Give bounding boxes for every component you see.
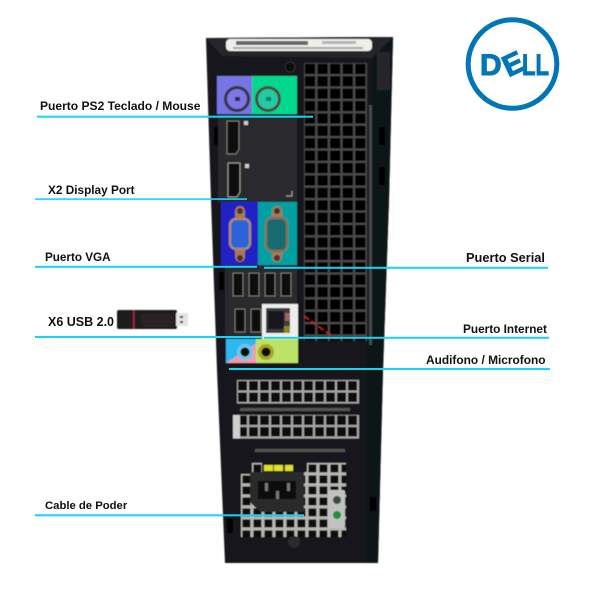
PCI slot 1	[237, 380, 359, 404]
PS2 purple panel	[217, 76, 252, 114]
service tag label	[226, 39, 372, 51]
side latch	[377, 52, 390, 90]
label: power cable: Cable de Poder	[45, 500, 128, 512]
line: serial	[264, 267, 548, 269]
audio blue panel	[226, 339, 257, 363]
line: display port	[35, 198, 247, 200]
audio green panel	[256, 339, 298, 363]
side slots	[214, 127, 385, 533]
lower slot marks	[255, 449, 345, 452]
display port panel	[218, 114, 297, 202]
line: VGA	[35, 266, 257, 268]
ethernet port	[262, 304, 298, 339]
power supply grille	[241, 463, 346, 537]
label: internet: Puerto Internet	[463, 322, 547, 336]
slot marks	[240, 408, 350, 411]
USB ports	[233, 273, 291, 332]
display port 2	[228, 163, 249, 197]
label: PS2: Puerto PS2 Teclado / Mouse	[40, 99, 201, 113]
label: serial: Puerto Serial	[466, 250, 545, 265]
PS2 green panel	[252, 76, 297, 114]
label: VGA: Puerto VGA	[45, 251, 111, 264]
line: power cable	[35, 514, 304, 516]
Dell logo: D	[480, 49, 502, 82]
power test panel	[328, 490, 345, 528]
screw	[285, 62, 295, 72]
serial teal panel	[258, 202, 297, 265]
right side panel	[366, 37, 393, 563]
label: USB: X6 USB 2.0	[48, 315, 114, 329]
red cable	[304, 316, 336, 339]
PCI slot 2	[233, 415, 359, 438]
Dell logo	[468, 20, 557, 108]
Dell logo: E	[497, 45, 529, 84]
Dell logo: LL	[522, 49, 549, 82]
label: audio: Audifono / Microfono	[426, 353, 546, 367]
chassis	[206, 37, 393, 563]
line: USB	[35, 336, 262, 338]
power socket	[250, 472, 304, 512]
top lip shading	[206, 37, 393, 58]
line: PS2	[37, 116, 313, 118]
ventilation grid	[304, 63, 367, 341]
VGA blue panel	[221, 202, 258, 265]
computer tower rear	[206, 37, 393, 563]
bottom screw	[288, 536, 300, 548]
display port 1	[227, 121, 248, 154]
line: internet	[264, 337, 549, 339]
icon: USB drive	[117, 310, 188, 329]
label: display port: X2 Display Port	[48, 183, 135, 197]
side rail	[369, 105, 372, 345]
USB panel	[225, 265, 297, 339]
panel corner mark	[286, 191, 292, 196]
line: audio	[229, 368, 550, 370]
